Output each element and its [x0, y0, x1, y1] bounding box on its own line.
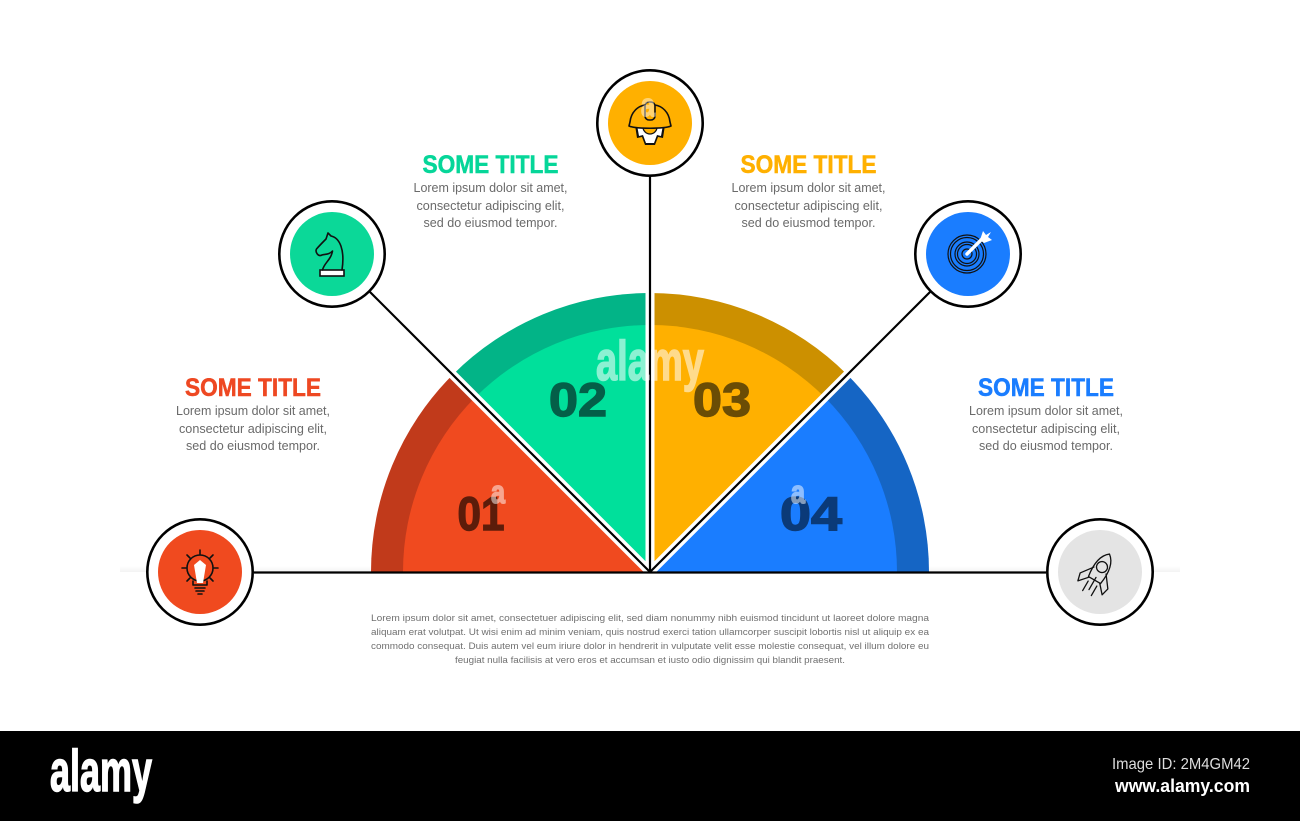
watermark: a — [791, 474, 805, 510]
heading and text: step 03: sed do eiusmod tempor. — [742, 216, 876, 230]
heading and text: step 04: Lorem ipsum dolor sit amet, — [969, 404, 1123, 418]
watermark: alamy — [596, 329, 704, 392]
heading and text: step 04: SOME TITLE — [978, 374, 1114, 402]
watermark: a — [641, 87, 655, 123]
segment 03 — [650, 293, 847, 572]
number 04: 04 — [780, 487, 842, 540]
icon: target badge — [915, 201, 1021, 307]
heading and text: step 04: consectetur adipiscing elit, — [972, 422, 1120, 436]
bottom text block — [371, 613, 930, 666]
watermark — [491, 87, 805, 510]
heading and text: step 01: sed do eiusmod tempor. — [186, 439, 320, 453]
footer logo: alamy — [50, 739, 152, 804]
icon: hard hat and gear badge — [597, 70, 703, 176]
heading and text: step 03: SOME TITLE — [740, 151, 876, 179]
heading and text: step 02: sed do eiusmod tempor. — [424, 216, 558, 230]
icon: knight badge — [279, 201, 385, 307]
connector lines — [254, 176, 1046, 572]
heading and text: step 04 — [969, 374, 1123, 453]
heading and text: step 02: consectetur adipiscing elit, — [416, 199, 564, 213]
heading and text: step 02: Lorem ipsum dolor sit amet, — [414, 181, 568, 195]
segment 02 — [453, 293, 650, 572]
bottom text block: Lorem ipsum dolor sit amet, consectetuer adipiscing elit, sed diam nonummy nibh euismod tincidunt ut laoreet dolore magna — [371, 613, 930, 624]
heading and text: step 01: SOME TITLE — [185, 374, 321, 402]
heading and text: step 01 — [176, 374, 330, 453]
footer bar — [0, 731, 1300, 821]
heading and text: step 01: consectetur adipiscing elit, — [179, 422, 327, 436]
heading and text: step 03: Lorem ipsum dolor sit amet, — [732, 181, 886, 195]
heading and text: step 02 — [414, 151, 568, 230]
heading and text: step 04: sed do eiusmod tempor. — [979, 439, 1113, 453]
bottom text block: commodo consequat. Duis autem vel eum iriure dolor in hendrerit in vulputate velit esse molestie consequat, vel illum dolore eu — [371, 641, 929, 652]
number 02: 02 — [549, 373, 607, 426]
watermark: a — [491, 474, 505, 510]
segment 01 — [371, 375, 650, 572]
heading and text: step 03 — [732, 151, 886, 230]
icon: light bulb badge — [147, 519, 253, 625]
image id: Image ID: 2M4GM42 — [1112, 756, 1250, 773]
icon: rocket badge — [1047, 519, 1153, 625]
website: www.alamy.com — [1114, 776, 1250, 796]
heading and text: step 03: consectetur adipiscing elit, — [734, 199, 882, 213]
segment 04 — [650, 375, 929, 572]
bottom text block: aliquam erat volutpat. Ut wisi enim ad minim veniam, quis nostrud exerci tation ullamcorper suscipit lobortis nisl ut aliquip ex ea — [371, 627, 930, 638]
heading and text: step 02: SOME TITLE — [422, 151, 558, 179]
heading and text: step 01: Lorem ipsum dolor sit amet, — [176, 404, 330, 418]
number 03: 03 — [693, 373, 751, 426]
bottom text block: feugiat nulla facilisis at vero eros et accumsan et iusto odio dignissim qui blandit praesent. — [455, 655, 845, 666]
panel: semicircle chart — [371, 285, 929, 572]
number 01: 01 — [458, 487, 504, 540]
